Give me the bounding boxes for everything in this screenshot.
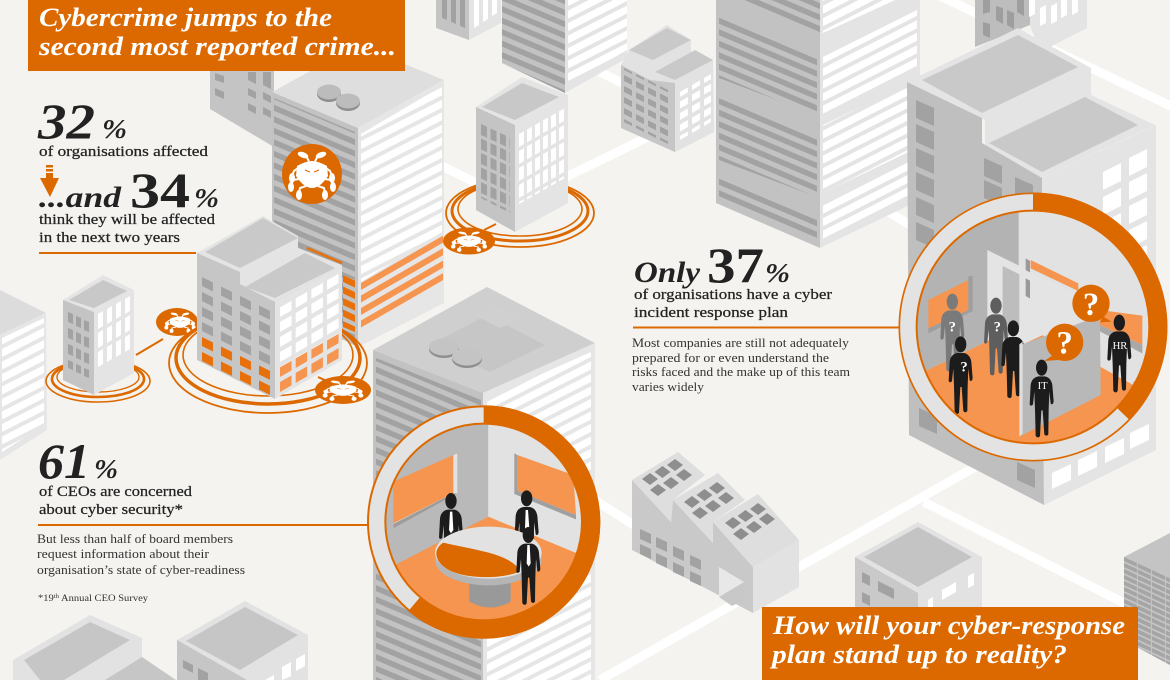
text: incident response body: Most companies are still not adequately <box>632 336 850 350</box>
building: top centre small <box>436 0 501 40</box>
solar panels <box>642 459 775 540</box>
room interior <box>386 424 581 620</box>
stat: 34%: in the next two years <box>39 230 180 246</box>
buildings: bottom left <box>13 601 308 680</box>
title box <box>28 0 405 71</box>
ring around small left building <box>46 360 150 402</box>
tower: main lower <box>373 287 595 680</box>
building: small right of tower <box>476 77 568 232</box>
bug badge: left <box>136 308 198 355</box>
stat: 37% <box>634 237 832 321</box>
building: large right block <box>907 28 1156 505</box>
team room: ? <box>960 360 968 376</box>
donut 61% <box>368 406 599 638</box>
stat: 32%: % <box>102 114 127 144</box>
stat: 32%: 32 <box>37 93 95 149</box>
team room: HR <box>1113 341 1128 352</box>
circle: response team <box>899 193 1170 465</box>
bug badge: block <box>315 376 371 404</box>
stat: 34% <box>39 162 219 246</box>
stat: 61% <box>38 433 193 518</box>
building: behind tower <box>210 70 274 147</box>
team room: IT <box>1038 381 1048 392</box>
footnote: *19 <box>38 594 52 604</box>
closing question box: How will your cyber-response <box>772 611 1125 640</box>
text: board members body: But less than half of board members <box>37 532 233 546</box>
closing question box <box>762 607 1138 680</box>
connector line: 37% <box>633 326 900 328</box>
text: incident response body <box>632 336 850 394</box>
building: striped top tower <box>502 0 627 93</box>
team room <box>918 212 1142 442</box>
roads <box>440 0 1170 680</box>
roof <box>272 45 444 128</box>
text: incident response body: prepared for or even understand the <box>632 351 829 365</box>
closing question box: plan stand up to reality? <box>770 640 1067 669</box>
circle: boardroom <box>368 406 599 638</box>
stat: 61%: of CEOs are concerned <box>39 484 193 500</box>
factory roofs <box>632 452 799 567</box>
foreground team members <box>949 315 1131 437</box>
title box: Cybercrime jumps to the <box>39 3 332 32</box>
footnote: Annual CEO Survey <box>59 594 148 604</box>
bug badge: small building <box>443 224 496 254</box>
ring around orange block <box>169 312 367 413</box>
building: far left edge <box>0 290 47 460</box>
building: lower right striped <box>1124 533 1170 665</box>
stat: 37%: incident response plan <box>634 305 789 321</box>
team room: ? <box>949 320 956 336</box>
stat: 34%: 34 <box>130 162 190 218</box>
text: board members body <box>37 532 245 577</box>
connector line: 61% <box>38 524 370 526</box>
stat: 37%: 37 <box>707 237 764 293</box>
speech bubbles: ? <box>1083 287 1099 323</box>
icon: down arrow <box>40 165 59 197</box>
text: board members body: organisation’s state of cyber-readiness <box>37 563 245 577</box>
divider: 34% <box>39 252 196 254</box>
text: board members body: request information about their <box>37 547 210 561</box>
title box: second most reported crime... <box>38 32 396 61</box>
factory end wall <box>753 540 799 613</box>
stat: 37%: of organisations have a cyber <box>634 287 832 303</box>
stat: 34%: think they will be affected <box>39 212 216 228</box>
background team members <box>940 294 1025 398</box>
ring around small building <box>446 179 594 247</box>
building: wide block with infected floors <box>197 216 342 400</box>
stat: 34%: ...and <box>39 181 122 214</box>
donut 37% <box>899 193 1167 461</box>
speech bubbles: ? <box>1057 325 1073 361</box>
stat: 32% <box>37 93 209 160</box>
stat: 34%: % <box>194 183 219 213</box>
speech bubbles <box>1044 285 1112 361</box>
building: small left <box>63 275 134 395</box>
stat: 61%: 61 <box>38 433 90 489</box>
stat: 61%: about cyber security* <box>39 502 183 518</box>
stat: 61%: % <box>94 454 118 484</box>
building: top right small <box>975 0 1087 52</box>
factory walls <box>632 480 753 613</box>
building: lower centre <box>855 522 982 620</box>
text: incident response body: varies widely <box>632 380 705 394</box>
tower: orange infected tower <box>272 45 444 347</box>
tower: tall centre right <box>716 0 920 248</box>
footnote: th <box>54 594 59 600</box>
stat: 32%: of organisations affected <box>39 144 209 160</box>
bug icon on tower <box>282 144 342 204</box>
text: incident response body: risks faced and the make up of this team <box>632 365 850 379</box>
team room: ? <box>994 320 1001 336</box>
factory door <box>719 567 744 606</box>
stat: 37%: Only <box>634 256 701 289</box>
factory <box>632 452 799 613</box>
building: small twin block <box>621 25 714 152</box>
stat: 37%: % <box>765 258 790 288</box>
factory windows <box>640 529 701 586</box>
